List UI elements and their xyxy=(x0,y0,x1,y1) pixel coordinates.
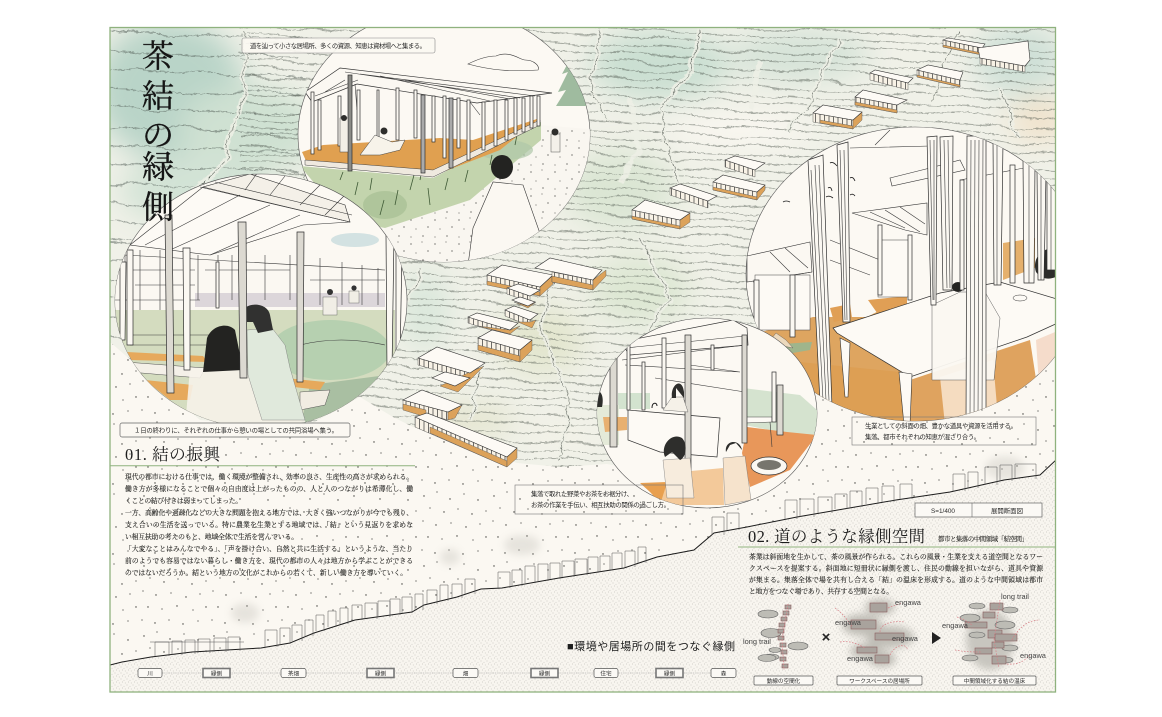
body text 01: 支え合いの生活を送っている。特に農業を生業とする地域では、「結」という見返りを求めな xyxy=(125,520,413,529)
person at table xyxy=(932,292,1000,380)
body text 02: 茶業は斜面地を生かして、茶の風景が作られる。これらの風景・生業を支える道空間となるワー xyxy=(749,552,1043,561)
left woman xyxy=(663,458,694,498)
diagram: circulation: long trail xyxy=(743,637,771,646)
heading 02: 02. 道のような縁側空間 xyxy=(748,527,925,546)
caption: top circle: 道を辿って小さな居場所、多くの資源、知恵は資材場へと集まる。 xyxy=(250,41,426,50)
diagram: circulation xyxy=(743,604,808,670)
illustration: right circle, long table among trunks xyxy=(746,127,1084,425)
stipple patches above the section line xyxy=(231,456,1025,623)
symbol: triangle arrow xyxy=(932,632,941,644)
diagram: intermediate commons: long trail xyxy=(1001,592,1029,601)
heading 01: 01. 結の振興 xyxy=(125,445,222,464)
strip: sequence of places: 縁側 xyxy=(375,670,386,678)
body text 01 xyxy=(125,472,413,577)
heading: connecting engawa: ■環境や居場所の間をつなぐ縁側 xyxy=(567,639,735,653)
strip: sequence of places: 縁側 xyxy=(211,670,222,678)
building modules along the slope xyxy=(403,38,1030,467)
caption: right circle: 集落、都市それぞれの知恵が混ざり合う。 xyxy=(865,432,980,441)
title: 茶 xyxy=(142,38,174,74)
body text 01: 働き方が多様になることで個々の自由度は上がったものの、人と人のつながりは希薄化し、働 xyxy=(125,484,413,493)
terrain: watercolour tea slopes xyxy=(95,20,1070,490)
caption: top circle xyxy=(242,38,435,53)
title: 緑 xyxy=(142,149,174,185)
table top xyxy=(833,282,1060,377)
title xyxy=(142,38,174,225)
scale box: S=1/400 xyxy=(931,508,955,515)
birds xyxy=(783,162,855,202)
caption: left circle xyxy=(120,423,350,437)
diagram labels: 中間領域化する結の温床 xyxy=(964,677,1026,685)
tree xyxy=(556,66,586,106)
body text 01: 前のようでも容易ではない暮らし・働き方を、現代の都市の人々は地方から学ぶことができる xyxy=(125,556,413,565)
diagram: workspace places: engawa xyxy=(895,598,922,607)
strip: sequence of places: 住宅 xyxy=(600,670,612,678)
roof xyxy=(620,320,748,355)
heading 02 subtitle: 都市と集落の中間領域「結空間」 xyxy=(938,534,1028,543)
posts xyxy=(165,215,174,393)
table xyxy=(743,417,772,423)
diagram: workspace places: engawa xyxy=(835,618,862,627)
caption: centre circle xyxy=(515,485,683,514)
diagram: intermediate commons: engawa xyxy=(942,621,969,630)
illustration: left circle, shelter with two women xyxy=(115,172,407,430)
back woman xyxy=(663,397,688,412)
roof xyxy=(305,68,552,103)
caption: centre circle: お茶の作業を手伝い、相互扶助の関係の過ごし方。 xyxy=(531,500,670,509)
diagram labels: 動線の空間化 xyxy=(767,677,801,685)
body text 01: のではないだろうか。結という地方の文化がこれからの若くて、新しい働き方を導いていく。 xyxy=(125,568,407,577)
people in shelter xyxy=(340,118,348,152)
infographic sheet xyxy=(109,26,1056,693)
seated figure on green xyxy=(786,342,812,353)
caption: right circle xyxy=(852,417,1036,445)
strip: sequence of places: 畑 xyxy=(463,670,469,678)
diagram: workspace places: engawa xyxy=(847,654,874,663)
title: 結 xyxy=(142,78,174,114)
body text 02 xyxy=(749,552,1043,596)
terrace edges xyxy=(195,30,1020,460)
green verge xyxy=(300,122,541,228)
illustration: top circle, timber shelter and road xyxy=(298,28,590,262)
body text 01: い相互扶助の考えのもと、地域全体で生活を営んでいる。 xyxy=(125,532,298,541)
person on road xyxy=(468,182,543,265)
strip: sequence of places: 茶畑 xyxy=(288,670,299,678)
strip: sequence of places: 縁側 xyxy=(539,670,550,678)
translucent bodies xyxy=(186,368,306,423)
far floors xyxy=(868,297,907,313)
table legs xyxy=(840,338,850,397)
right woman xyxy=(723,456,751,505)
far woman xyxy=(594,391,603,407)
diagram: intermediate commons xyxy=(942,592,1047,670)
plate of vegetables xyxy=(751,457,787,475)
title: 側 xyxy=(142,189,174,225)
body text 01: 現代の都市における仕事では、働く環境が整備され、効率の良さ、生産性の高さが求められる。 xyxy=(125,472,413,481)
diagram: intermediate commons: engawa xyxy=(1020,651,1047,660)
diagram: workspace places: engawa xyxy=(892,634,919,643)
diagram labels: ワークスペースの居場所 xyxy=(849,677,910,685)
strip: sequence of places: 森 xyxy=(721,670,727,678)
strip: sequence of places: 縁側 xyxy=(664,670,675,678)
trunks xyxy=(808,155,832,407)
posts xyxy=(311,92,314,154)
orange floor xyxy=(742,427,817,487)
body text 01: くことの結び付きは弱まってしまった。 xyxy=(125,496,242,505)
caption: left circle: １日の終わりに、それぞれの仕事から憩いの場としての共同浴場へ集う。 xyxy=(134,426,338,434)
green beyond xyxy=(743,388,817,440)
body text 02: クスペースを提案する。斜面地に短冊状に縁側を渡し、住民の動線を担いながら、道具や資源 xyxy=(749,564,1043,572)
strip: sequence of places xyxy=(138,668,736,678)
caption: right circle: 生業としての斜面の畑、豊かな道具や資源を活用する。 xyxy=(865,421,1017,430)
section line xyxy=(110,460,1056,665)
counter xyxy=(628,410,720,457)
road xyxy=(398,129,590,262)
body text 01: 「大変なことはみんなでやる」、「声を掛け合い、自然と共に生活する」というような、当たり xyxy=(125,544,413,553)
diagram labels xyxy=(754,676,1036,685)
orange ground xyxy=(764,312,902,372)
roof mid xyxy=(852,203,927,235)
orange decks xyxy=(127,352,208,362)
strip: sequence of places: 川 xyxy=(147,672,153,678)
section buildings xyxy=(150,464,1036,656)
body text 01: 一方、高齢化や過疎化などの大きな問題を抱える地方では、大きく強いつながりが今でも残り、 xyxy=(125,508,413,517)
cloud xyxy=(468,54,538,71)
roof xyxy=(130,175,350,255)
illustration: centre circle, kitchen counter and three women xyxy=(594,318,817,508)
posts xyxy=(685,335,691,470)
symbol: times: × xyxy=(822,629,831,646)
lawn xyxy=(115,310,395,430)
orange floor xyxy=(302,118,540,172)
ground mass below section line xyxy=(110,440,1056,692)
caption: centre circle: 集落で取れた野菜やお茶をお裾分け、 xyxy=(531,489,633,498)
body text 02: が集まる。集落全体で場を共有し合える「結」の温床を形成する。道のような中間領域は都市 xyxy=(749,575,1043,584)
back wall xyxy=(115,250,128,310)
title: の xyxy=(142,117,174,153)
body text 02: と地方をつなぐ場であり、共存する空間となる。 xyxy=(749,586,893,596)
scale box: 展開断面図 xyxy=(991,506,1023,515)
scale box xyxy=(915,503,1042,517)
distant people xyxy=(323,297,337,315)
diagram: workspace places xyxy=(835,598,922,667)
left roof and wall xyxy=(747,242,812,282)
